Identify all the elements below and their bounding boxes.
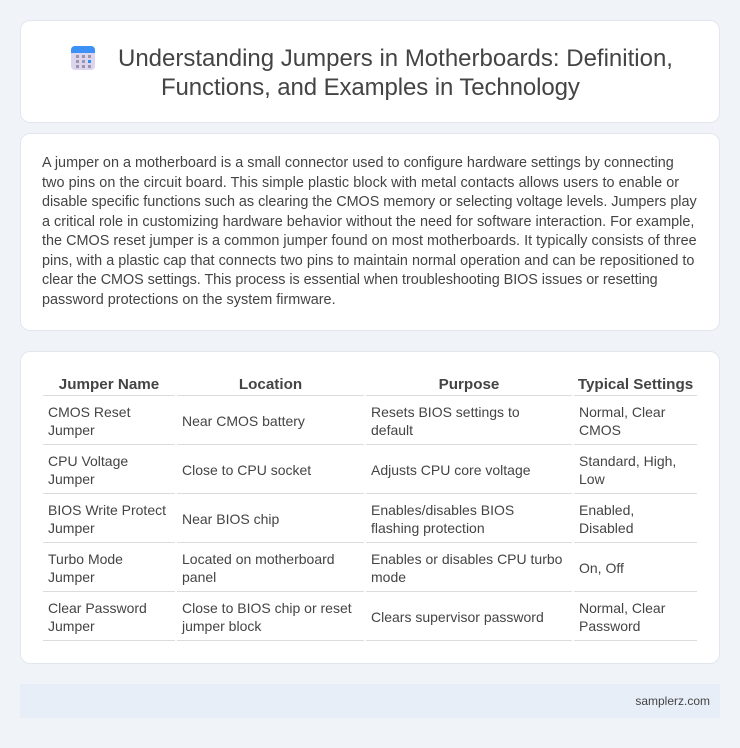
footer credit: samplerz.com bbox=[635, 694, 710, 708]
row 1: CMOS Reset Jumper: CMOS Reset bbox=[48, 404, 130, 420]
row 4 purpose: Enables or disables CPU turbo bbox=[371, 551, 562, 567]
row 2 settings bbox=[579, 453, 676, 487]
title line 2: Functions, and Examples in Technology bbox=[161, 74, 580, 101]
table header: Typical Settings: Typical Settings bbox=[578, 376, 693, 393]
description text: A jumper on a motherboard is a small connector used to configure hardware settings by connecting bbox=[42, 155, 674, 171]
description text: disable specific functions such as clearing the CMOS memory or selecting voltage levels. Jumpers play bbox=[42, 194, 697, 210]
row 3: BIOS Write Protect Jumper: Jumper bbox=[48, 520, 95, 536]
row 3 purpose: flashing protection bbox=[371, 520, 485, 536]
row 4 settings: On, Off bbox=[579, 560, 624, 576]
row 1: CMOS Reset Jumper bbox=[48, 404, 130, 438]
description text bbox=[42, 155, 697, 308]
description text: a critical role in customizing hardware behavior without the need for software interaction. For example, bbox=[42, 214, 694, 230]
row 1 settings: CMOS bbox=[579, 422, 621, 438]
row 3 settings: Disabled bbox=[579, 520, 633, 536]
row 3: BIOS Write Protect Jumper bbox=[48, 502, 166, 536]
footer bar bbox=[20, 684, 720, 718]
row 5: Clear Password Jumper bbox=[48, 600, 147, 634]
row 5: Clear Password Jumper: Jumper bbox=[48, 618, 95, 634]
row 1 purpose: default bbox=[371, 422, 413, 438]
row 2 purpose: Adjusts CPU core voltage bbox=[371, 462, 531, 478]
row 5 settings: Normal, Clear bbox=[579, 600, 665, 616]
row 4 location bbox=[182, 551, 335, 585]
row 3 purpose bbox=[371, 502, 514, 536]
row 3 purpose: Enables/disables BIOS bbox=[371, 502, 514, 518]
icon: calendar bbox=[71, 46, 95, 70]
row 1 settings bbox=[579, 404, 666, 438]
row 2: CPU Voltage Jumper: CPU Voltage bbox=[48, 453, 128, 469]
table header: Jumper Name: Jumper Name bbox=[59, 376, 159, 393]
description text: the CMOS reset jumper is a common jumper found on most motherboards. It typically consists of three bbox=[42, 233, 697, 249]
row 5 settings: Password bbox=[579, 618, 640, 634]
row 2 settings: Low bbox=[579, 471, 605, 487]
title card bbox=[20, 20, 720, 123]
row 1 location: Near CMOS battery bbox=[182, 413, 305, 429]
row 2 settings: Standard, High, bbox=[579, 453, 676, 469]
row 4 location: Located on motherboard bbox=[182, 551, 335, 567]
description text: two pins on the circuit board. This simple plastic block with metal contacts allows users to enable or bbox=[42, 174, 679, 190]
row 4 purpose bbox=[371, 551, 562, 585]
row 5 settings bbox=[579, 600, 666, 634]
description text: password protections on the system firmware. bbox=[42, 292, 336, 308]
row 3 settings bbox=[579, 502, 634, 536]
row 5: Clear Password Jumper: Clear Password bbox=[48, 600, 147, 616]
description text: clear the CMOS settings. This process is essential when troubleshooting BIOS issues or resetting bbox=[42, 272, 658, 288]
row 5 purpose: Clears supervisor password bbox=[371, 609, 544, 625]
row 4: Turbo Mode Jumper: Turbo Mode bbox=[48, 551, 123, 567]
panel: description bbox=[20, 133, 720, 331]
row 1 purpose bbox=[371, 404, 520, 438]
row 2: CPU Voltage Jumper: Jumper bbox=[48, 471, 95, 487]
table header: Location: Location bbox=[239, 376, 302, 393]
row 2 location: Close to CPU socket bbox=[182, 462, 311, 478]
row 2: CPU Voltage Jumper bbox=[48, 453, 128, 487]
row 5 location: Close to BIOS chip or reset bbox=[182, 600, 352, 616]
description text: pins, with a plastic cap that connects two pins to maintain normal operation and can be repositioned to bbox=[42, 252, 694, 268]
row 4 location: panel bbox=[182, 569, 216, 585]
row 1 purpose: Resets BIOS settings to bbox=[371, 404, 520, 420]
row 3: BIOS Write Protect Jumper: BIOS Write Protect bbox=[48, 502, 166, 518]
row 3 location: Near BIOS chip bbox=[182, 511, 279, 527]
title: Understanding Jumpers in Motherboards: Definition, bbox=[118, 45, 673, 72]
row 3 settings: Enabled, bbox=[579, 502, 634, 518]
row 1: CMOS Reset Jumper: Jumper bbox=[48, 422, 95, 438]
row 1 settings: Normal, Clear bbox=[579, 404, 665, 420]
panel: table bbox=[20, 351, 720, 664]
row 5 location: jumper block bbox=[182, 618, 261, 634]
table header: Purpose: Purpose bbox=[439, 376, 499, 393]
row 4 purpose: mode bbox=[371, 569, 406, 585]
row 4: Turbo Mode Jumper bbox=[48, 551, 123, 585]
row 4: Turbo Mode Jumper: Jumper bbox=[48, 569, 95, 585]
row 5 location bbox=[182, 600, 352, 634]
